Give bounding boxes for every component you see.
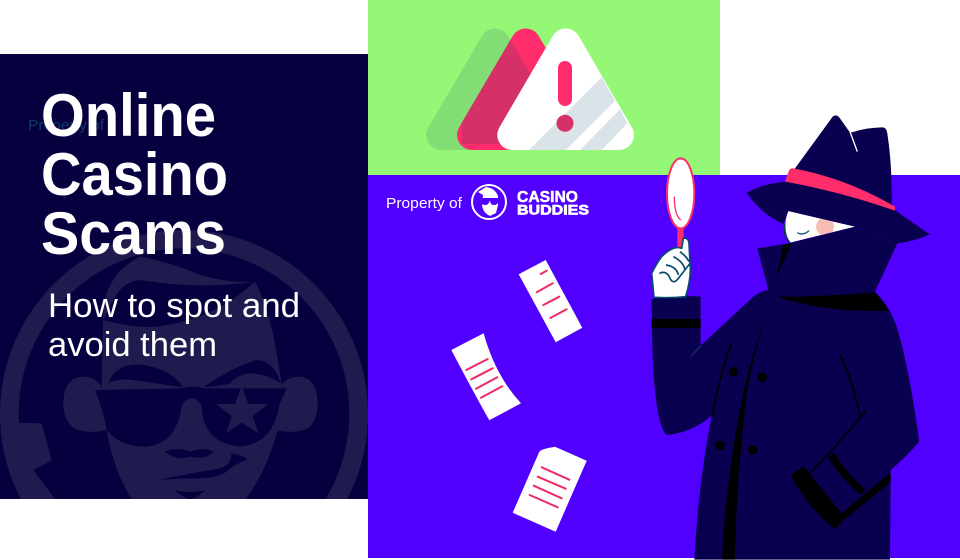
hand bbox=[652, 238, 690, 298]
title: Scams bbox=[41, 200, 226, 267]
logo: casino buddies: CASINO bbox=[517, 189, 578, 206]
subtitle: avoid them bbox=[48, 326, 217, 364]
title bbox=[41, 82, 228, 267]
logo: casino buddies: BUDDIES bbox=[517, 202, 589, 218]
hat bbox=[747, 115, 930, 243]
coat bbox=[652, 227, 919, 560]
face bbox=[785, 211, 855, 243]
panel: navy title background bbox=[0, 54, 368, 499]
panel: purple illustration background bbox=[368, 175, 960, 558]
document: top paper bbox=[519, 260, 582, 342]
title: Online bbox=[41, 82, 216, 149]
property of label: Property of bbox=[386, 196, 463, 212]
illustration: detective bbox=[652, 115, 930, 560]
icon: warning triangles bbox=[441, 44, 627, 150]
watermark: casino buddies mascot bbox=[0, 230, 368, 499]
coat details bbox=[652, 243, 891, 560]
subtitle: How to spot and bbox=[48, 287, 300, 325]
magnifying glass bbox=[677, 227, 684, 250]
document: bottom paper bbox=[513, 447, 587, 532]
ghost text: property of: Property of bbox=[28, 118, 105, 134]
document: middle paper bbox=[451, 333, 521, 420]
subtitle bbox=[48, 287, 300, 364]
logo: casino buddies bbox=[472, 185, 589, 219]
panel: green warning background bbox=[368, 0, 720, 175]
title: Casino bbox=[41, 141, 228, 208]
